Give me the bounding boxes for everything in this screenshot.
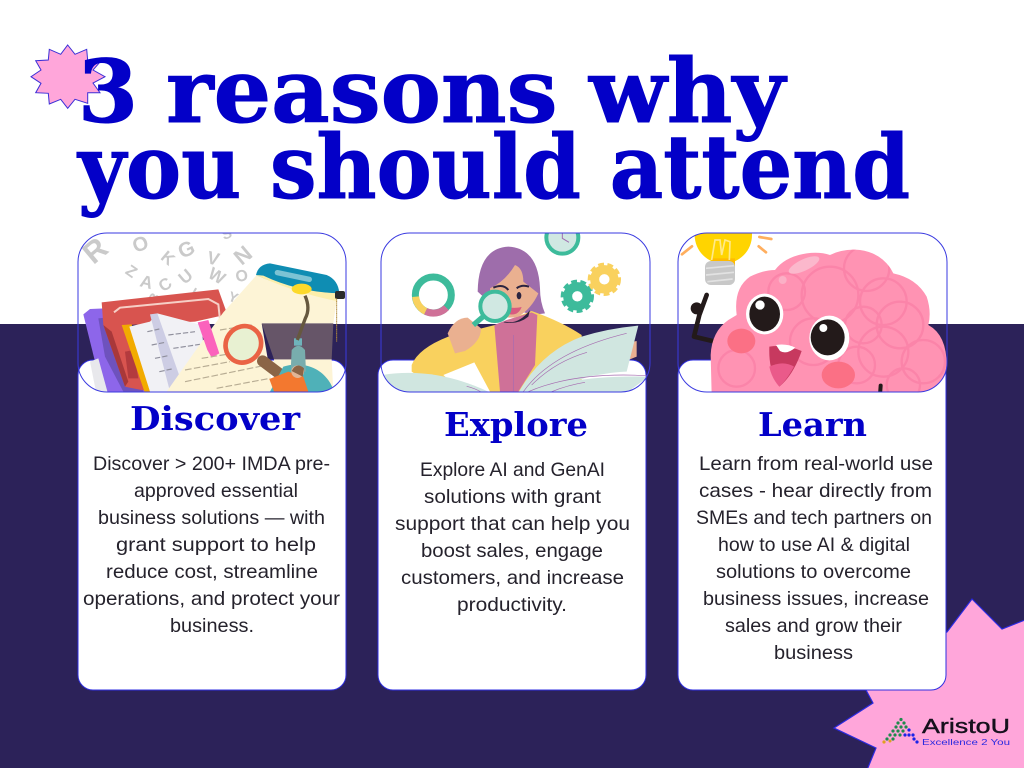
text: learn description: solutions to overcome (716, 561, 911, 583)
letters floating above the book: A (138, 271, 156, 293)
jacket (412, 311, 582, 392)
magnifying glass (480, 292, 510, 321)
white sleeve gap (443, 362, 490, 392)
small person at base (269, 365, 308, 392)
logo wordmark: AristoU (922, 716, 1010, 738)
text: learn description: SMEs and tech partners on (696, 507, 932, 529)
text: explore description: support that can help you (395, 513, 630, 535)
card body: learn (678, 360, 946, 690)
illustration: pink brain and light bulb (680, 234, 946, 392)
red book (102, 289, 227, 392)
letters floating above the book: Y (226, 288, 241, 306)
letters floating above the book: C (155, 273, 176, 296)
text: learn description (696, 453, 933, 664)
text: learn description: business issues, increase (703, 588, 929, 610)
heading: Discover: Discover (130, 399, 301, 438)
letters floating above the book: U (174, 265, 197, 288)
logo tagline: Excellence 2 You (922, 738, 1010, 747)
light bulb (680, 234, 773, 285)
brain arm pointing (691, 295, 715, 342)
logo mark: dotted triangle (882, 718, 919, 744)
image frame: learn (678, 233, 947, 392)
donut chart icon (415, 277, 451, 313)
gear icons (563, 265, 619, 311)
panel: discover (77, 225, 346, 690)
illustration: book, magnifier and lamp (77, 225, 345, 395)
letters floating above the book (82, 234, 252, 302)
decoration: pink starburst bottom right (834, 599, 1024, 768)
letters floating above the book: O (130, 232, 152, 258)
text: explore description: solutions with grant (424, 486, 602, 508)
heading: Explore: Explore (444, 405, 588, 444)
text: discover description (83, 453, 341, 637)
left eye (746, 294, 783, 334)
brain highlight (788, 256, 820, 274)
letters floating above the book: L (188, 284, 204, 303)
text: discover description: reduce cost, streamline (106, 561, 318, 583)
purple book (83, 308, 144, 392)
text: explore description: Explore AI and GenAI (420, 459, 605, 481)
letters floating above the book: S (220, 225, 235, 244)
brain body (711, 250, 947, 395)
letters floating above the book: K (157, 247, 179, 269)
letters floating above the book: G (174, 236, 199, 264)
title: reasons why (166, 39, 788, 143)
decoration: pink starburst behind title (31, 45, 105, 108)
text: learn description: sales and grow their (725, 615, 903, 637)
yellow page edge (122, 324, 150, 393)
text: explore description: boost sales, engage (421, 540, 603, 562)
heading: Learn: Learn (758, 405, 867, 444)
text: discover description: Discover > 200+ IMDA pre- (93, 453, 330, 475)
text: explore description (395, 459, 630, 616)
text: discover description: grant support to help (116, 534, 316, 556)
lamp base (270, 296, 334, 392)
light beam over dark band (262, 323, 333, 359)
background: white upper band (0, 0, 1024, 324)
open book left page (382, 373, 488, 393)
image frame: explore (381, 233, 650, 392)
pink bookmark (198, 320, 219, 358)
text: discover description: operations, and protect your (83, 588, 341, 610)
image frame: discover (78, 233, 346, 392)
hair (478, 247, 545, 315)
letters floating above the book: O (234, 267, 249, 286)
text: discover description: business. (170, 615, 254, 637)
text: learn description: business (774, 642, 853, 664)
panel: explore (378, 222, 650, 690)
brain scribble lines (718, 246, 945, 402)
text: explore description: productivity. (457, 594, 567, 616)
background: dark navy lower band (0, 324, 1024, 768)
clock icon (544, 234, 580, 256)
text: learn description: Learn from real-world use (699, 453, 933, 475)
logo: AristoU (882, 716, 1010, 747)
letters floating above the book: Z (122, 262, 140, 282)
panel: learn (678, 206, 947, 690)
title: 3 (78, 42, 138, 143)
open book right page (519, 326, 638, 392)
illustration: person reading with magnifier (382, 222, 648, 393)
brain second arm (874, 386, 887, 395)
cheeks (727, 329, 755, 353)
title (76, 39, 910, 219)
text lines on page (185, 325, 270, 388)
text: explore description: customers, and increase (401, 567, 624, 589)
text: discover description: approved essential (134, 480, 298, 502)
mouth (769, 345, 802, 387)
magnifying glass (223, 324, 282, 377)
letters floating above the book: W (205, 263, 230, 289)
text: learn description: cases - hear directly from (699, 480, 932, 502)
hand with magnifier (448, 318, 481, 353)
title: you should attend (76, 115, 910, 219)
card body: discover (78, 360, 346, 690)
face (490, 265, 538, 318)
letters floating above the book: R (77, 231, 115, 271)
lamp shade (256, 263, 345, 342)
letters floating above the book: B (145, 290, 164, 308)
right eye (809, 316, 849, 360)
far hand (630, 341, 637, 360)
open book pages (129, 313, 203, 392)
text: discover description: business solutions — with (98, 507, 325, 529)
card body: explore (378, 360, 646, 690)
letters floating above the book: V (205, 247, 222, 270)
text: learn description: how to use AI & digital (718, 534, 910, 556)
lamp light beam (167, 275, 337, 392)
shirt (494, 312, 537, 392)
letters floating above the book: N (229, 241, 257, 270)
